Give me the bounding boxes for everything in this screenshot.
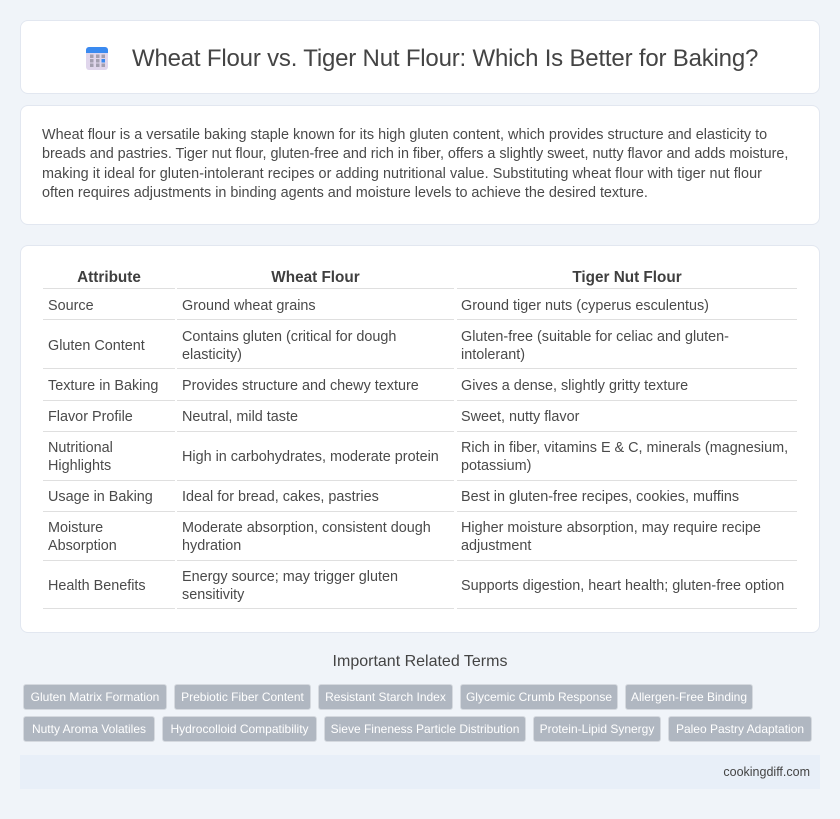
comparison table panel: sensitivity [182, 587, 244, 603]
row: gluten content: Gluten Content [48, 338, 145, 354]
row: health benefits: Health Benefits [48, 578, 146, 594]
related terms tags: Resistant Starch Index [325, 690, 446, 704]
intro text: Wheat flour is a versatile baking staple known for its high gluten content, which provides structure and elasticity to [42, 127, 767, 143]
related terms heading: Important Related Terms [333, 653, 507, 670]
comparison table panel: Ground wheat grains [182, 298, 316, 314]
comparison table panel: Neutral, mild taste [182, 409, 298, 425]
comparison table panel: Rich in fiber, vitamins E & C, minerals (magnesium, [461, 440, 788, 456]
comparison table panel: Gives a dense, slightly gritty texture [461, 378, 688, 394]
title: Wheat Flour vs. Tiger Nut Flour: Which Is Better for Baking? [132, 45, 758, 72]
icon: calendar [86, 47, 108, 70]
comparison table panel: intolerant) [461, 347, 525, 363]
related terms tags: Allergen-Free Binding [631, 690, 747, 704]
related terms tags: Hydrocolloid Compatibility [170, 722, 309, 736]
related terms tags: Gluten Matrix Formation [31, 690, 159, 704]
comparison table panel: Energy source; may trigger gluten [182, 569, 398, 585]
table header: tiger nut flour: Tiger Nut Flour [572, 269, 682, 286]
comparison table panel: Moderate absorption, consistent dough [182, 520, 431, 536]
intro text [42, 127, 788, 201]
comparison table panel: elasticity) [182, 347, 242, 363]
comparison table panel: Highlights [48, 458, 111, 474]
intro text: making it ideal for gluten-intolerant recipes or adding nutritional value. Substituting wheat flour with tiger nut flour [42, 166, 762, 182]
related terms tags: Paleo Pastry Adaptation [676, 722, 804, 736]
related terms tags: Glycemic Crumb Response [466, 690, 612, 704]
footer bar [20, 755, 820, 789]
comparison table panel: Ground tiger nuts (cyperus esculentus) [461, 298, 709, 314]
row: moisture absorption: Moisture [48, 520, 103, 536]
row: nutritional highlights: Nutritional [48, 440, 113, 456]
comparison table panel: High in carbohydrates, moderate protein [182, 449, 439, 465]
comparison table panel: Absorption [48, 538, 117, 554]
row: flavor profile: Flavor Profile [48, 409, 133, 425]
comparison table panel: Sweet, nutty flavor [461, 409, 579, 425]
comparison table panel: potassium) [461, 458, 531, 474]
comparison table panel [20, 245, 820, 633]
related terms tags [23, 684, 812, 742]
header panel [20, 20, 820, 94]
row: usage in baking: Usage in Baking [48, 489, 153, 505]
related terms tags: Nutty Aroma Volatiles [32, 722, 146, 736]
row: source: Source [48, 298, 94, 314]
comparison table panel: Gluten-free (suitable for celiac and gluten- [461, 329, 729, 345]
comparison table panel: hydration [182, 538, 241, 554]
comparison table panel: Ideal for bread, cakes, pastries [182, 489, 379, 505]
comparison table panel: adjustment [461, 538, 531, 554]
comparison table panel: Contains gluten (critical for dough [182, 329, 396, 345]
intro panel [20, 105, 820, 225]
comparison table panel: Supports digestion, heart health; gluten-free option [461, 578, 784, 594]
comparison table panel: Provides structure and chewy texture [182, 378, 419, 394]
footer source: cookingdiff.com [723, 765, 810, 779]
comparison table panel: Higher moisture absorption, may require recipe [461, 520, 761, 536]
related terms tags: Protein-Lipid Synergy [540, 722, 654, 736]
row: texture in baking: Texture in Baking [48, 378, 158, 394]
intro text: often requires adjustments in binding agents and moisture levels to achieve the desired texture. [42, 185, 648, 201]
related terms tags: Prebiotic Fiber Content [181, 690, 304, 704]
related terms tags: Sieve Fineness Particle Distribution [331, 722, 519, 736]
table header: wheat flour: Wheat Flour [271, 269, 360, 286]
table header: attribute: Attribute [77, 269, 141, 286]
comparison table panel: Best in gluten-free recipes, cookies, muffins [461, 489, 739, 505]
intro text: breads and pastries. Tiger nut flour, gluten-free and rich in fiber, offers a slightly sweet, nutty flavor and adds moisture, [42, 146, 788, 162]
